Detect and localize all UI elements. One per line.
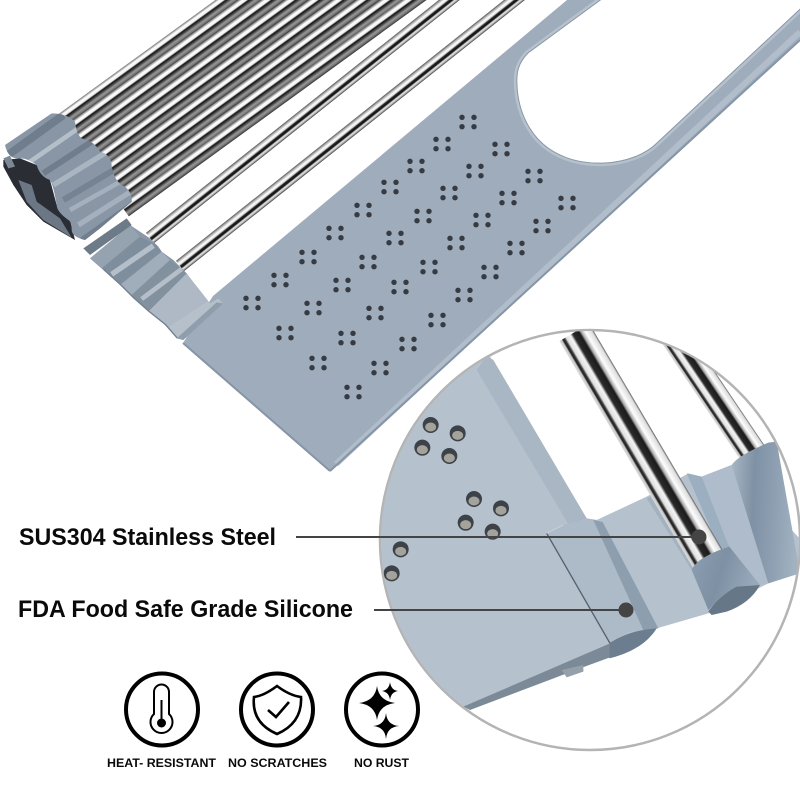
magnified small ridge [687,473,730,550]
drain holes [243,115,576,399]
silicone strip with ridges [90,226,222,340]
magnified detail circle [370,317,800,750]
icon: no rust sparkles: NO RUST [354,756,410,770]
icon: no scratches shield: NO SCRATCHES [228,756,327,770]
callout: stainless steel: SUS304 Stainless Steel [19,524,276,551]
perforated silicone plate [183,0,800,471]
flat stainless steel rods [146,0,536,271]
magnified holes [423,417,439,433]
magnified flat silicone [702,465,732,546]
callout: silicone [18,596,634,623]
magnified thin rod [662,344,764,458]
magnified lower cap [692,547,760,610]
magnified thick rod [559,324,723,568]
magnified big ridge [732,442,800,583]
callout: stainless steel [19,524,706,551]
rolled stainless steel rods [56,0,582,216]
magnified plate [381,356,799,706]
icon: no scratches shield [228,674,327,770]
rolled silicone end [3,114,132,255]
handle cut-out [517,0,800,163]
callout: silicone: FDA Food Safe Grade Silicone [18,596,353,623]
icon: no rust sparkles [346,674,418,770]
magnified silicone ridge [586,518,600,623]
icon: heat resistant thermometer: HEAT- RESISTANT [107,756,217,770]
icon: heat resistant thermometer [107,674,217,770]
magnified rod gutter [647,495,695,570]
